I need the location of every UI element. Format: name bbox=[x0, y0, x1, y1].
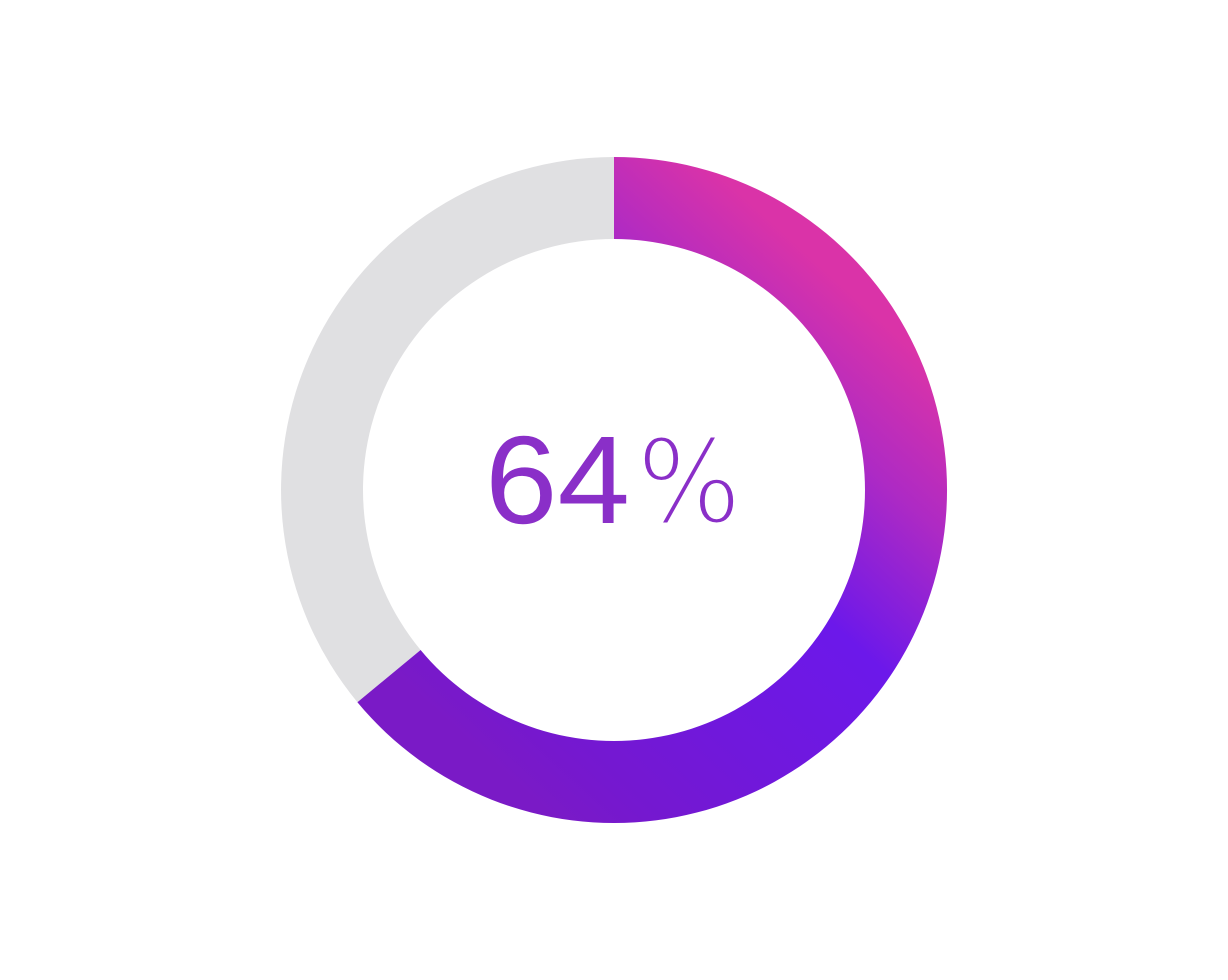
filled 64% gradient ring segment bbox=[357, 157, 947, 823]
percent sign: % bbox=[637, 413, 741, 551]
center value label: 64% bbox=[485, 411, 741, 551]
remaining 36% grey ring segment bbox=[281, 157, 614, 702]
number 64: 64 bbox=[485, 411, 630, 550]
